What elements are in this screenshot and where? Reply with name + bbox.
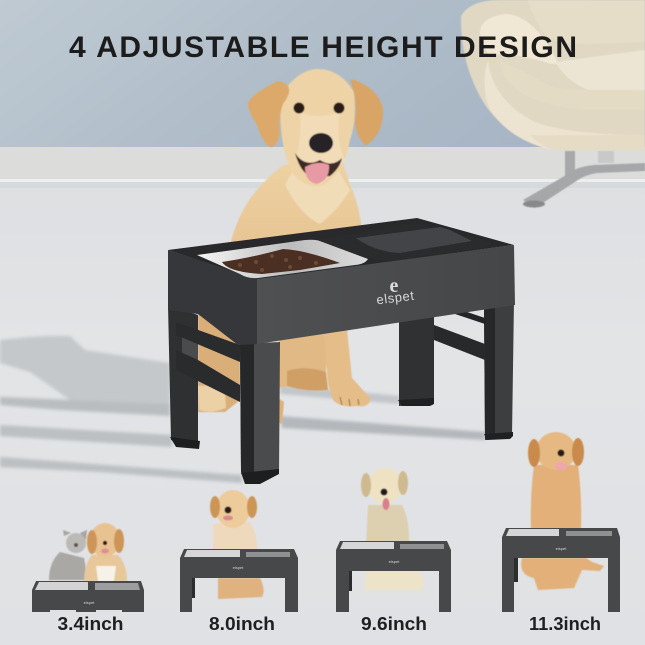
- stand: front face: [257, 245, 515, 344]
- stand: brand logo: e: [390, 275, 399, 297]
- stand: elspet: [556, 546, 567, 551]
- stand: elspet: [84, 600, 95, 605]
- height label: 3.4inch: [58, 614, 124, 634]
- sofa: [461, 0, 645, 208]
- stand: brand logo: elspet: [376, 288, 415, 307]
- stand: top surface: [168, 218, 514, 279]
- stand: second bowl with lid: [317, 223, 490, 260]
- dog: nose: [309, 133, 333, 153]
- stand: steel bowl: [197, 240, 368, 278]
- stand: left face: [168, 250, 258, 345]
- dog: mouth and tongue: [295, 153, 342, 178]
- background: room wall: [0, 0, 645, 148]
- stand: [180, 549, 298, 612]
- dog: head: [280, 69, 355, 186]
- dog: left flank and paw seen under stand: [198, 312, 240, 412]
- dog: ears: [248, 81, 289, 147]
- dog: body: [228, 160, 363, 330]
- background: floor: [0, 147, 645, 645]
- floor shadows: [0, 336, 485, 483]
- small size 2: puppy and 8.0 inch stand: [180, 490, 298, 634]
- dog: hind leg: [278, 322, 330, 388]
- stand: kibble: [222, 249, 340, 274]
- dog: front leg and paw: [323, 320, 371, 406]
- title: 4 ADJUSTABLE HEIGHT DESIGN: [69, 31, 577, 64]
- sofa chrome legs: [523, 151, 645, 208]
- small size 1: kitten, puppy and 3.4 inch stand: [32, 523, 144, 634]
- puppy: [84, 523, 127, 581]
- stand: brand logo: [376, 275, 415, 307]
- puppy: [210, 490, 264, 599]
- stand: front leg: [240, 342, 280, 484]
- large elevated feeder stand: [168, 218, 515, 484]
- kitten: [49, 530, 88, 580]
- height label: 8.0inch: [209, 614, 275, 634]
- stand: rear braces: [434, 325, 485, 360]
- dog: [361, 468, 424, 590]
- stand: [502, 528, 620, 612]
- stand: elspet: [389, 559, 400, 564]
- stand: rear legs: [399, 303, 434, 406]
- stand: elspet: [233, 565, 244, 570]
- height label: 9.6inch: [361, 614, 427, 634]
- stand: left legs and braces: [168, 305, 198, 444]
- height label: 11.3inch: [529, 614, 601, 634]
- dog: eyes: [294, 102, 304, 114]
- stand: [336, 541, 451, 612]
- large dog: [198, 69, 383, 424]
- small size 3: cream dog and 9.6 inch stand: [336, 468, 451, 634]
- small size 4: tall golden dog and 11.3 inch stand: [502, 432, 620, 634]
- dog: [521, 432, 604, 590]
